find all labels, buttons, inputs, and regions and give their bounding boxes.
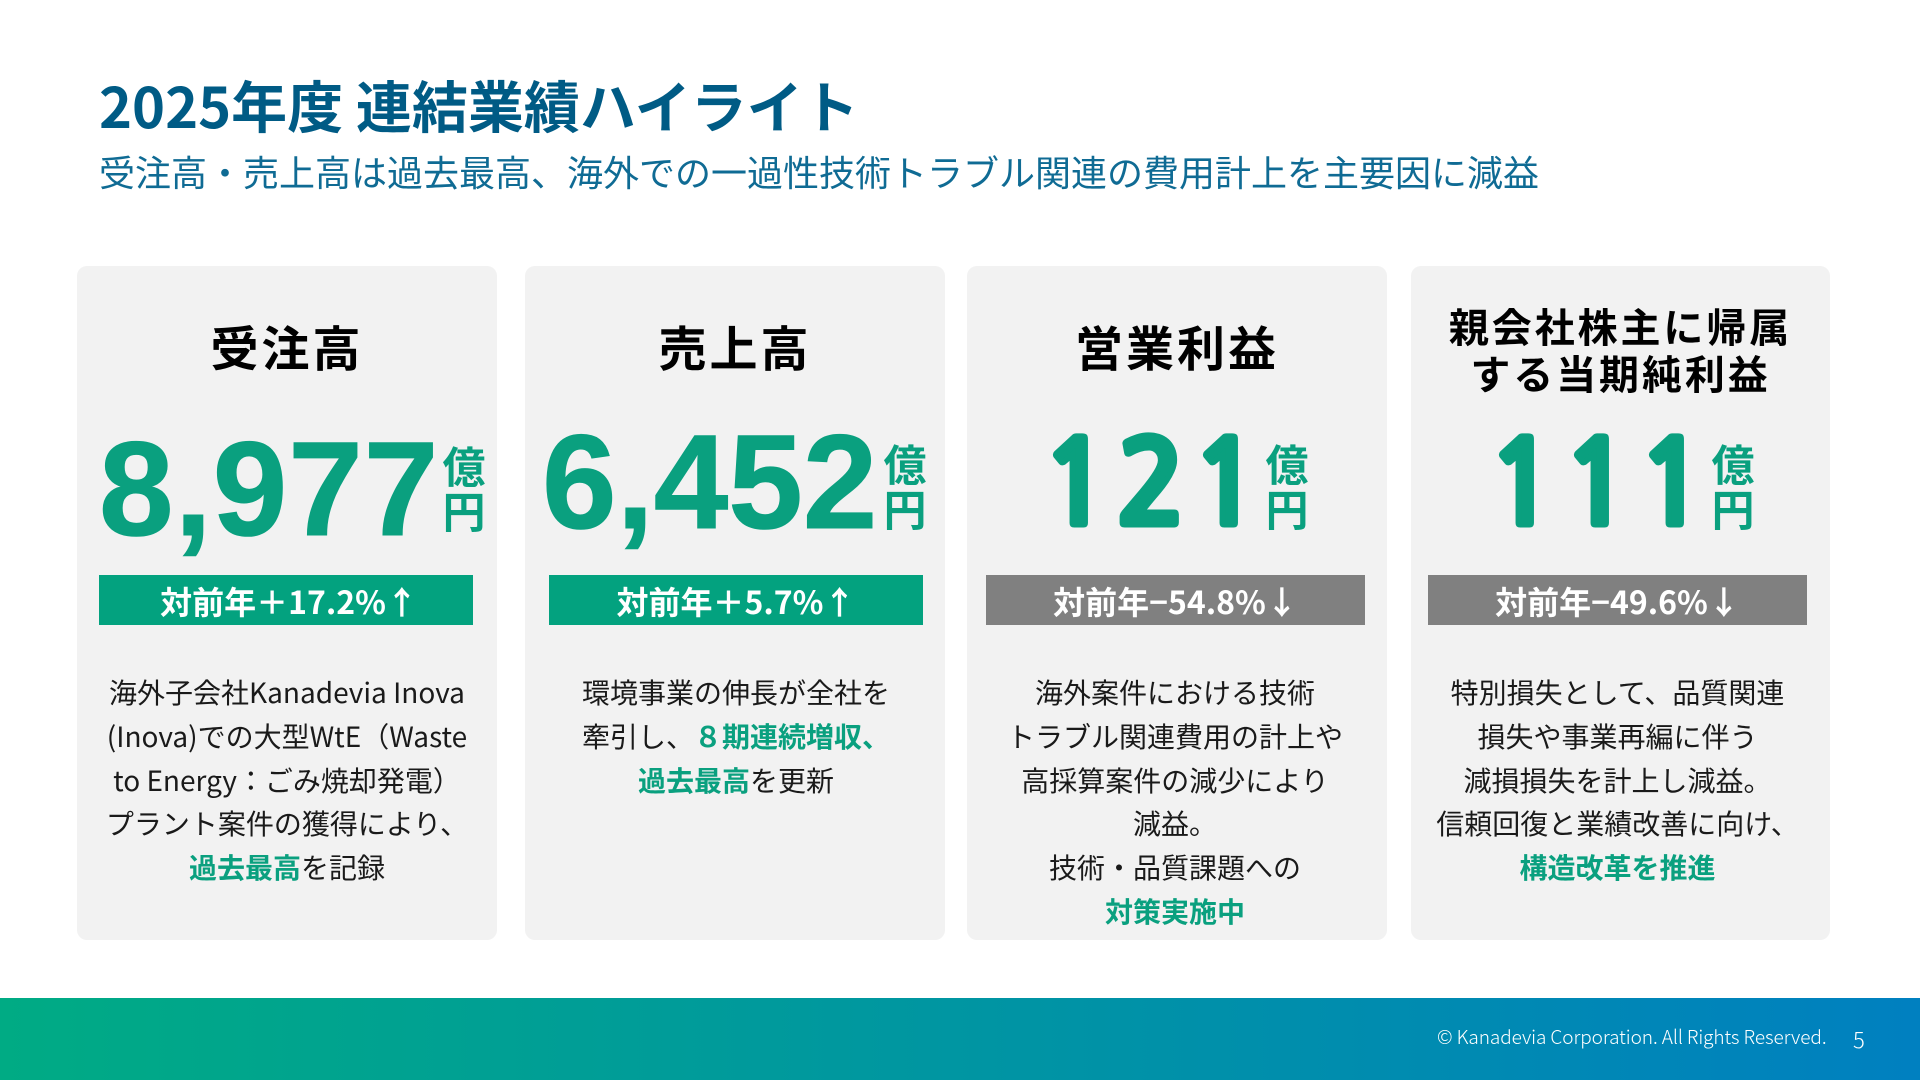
description: 過去最高を更新 [638, 760, 834, 800]
description: 高採算案件の減少により [1021, 760, 1329, 800]
description: 牽引し、８期連続増収、 [582, 716, 890, 756]
description: 信頼回復と業績改善に向け、 [1436, 803, 1799, 843]
change badge [99, 575, 473, 625]
description: 対策実施中 [1105, 891, 1245, 931]
figure: 111: 111 [1487, 427, 1712, 542]
panel: net income [1411, 266, 1830, 940]
description: トラブル関連費用の計上や [1007, 716, 1343, 756]
heading: net income [1449, 296, 1792, 401]
subtitle: 受注高・売上高は過去最高、海外での一過性技術トラブル関連の費用計上を主要因に減益 [99, 145, 1539, 197]
description: 海外子会社Kanadevia Inova [109, 672, 465, 712]
change badge: 対前年−49.6%↓ [1495, 578, 1740, 624]
description: 損失や事業再編に伴う [1477, 716, 1758, 756]
description: 構造改革を推進 [1519, 847, 1716, 887]
description: to Energy：ごみ焼却発電） [113, 760, 461, 800]
copyright: © Kanadevia Corporation. All Rights Reserved. [1437, 1023, 1826, 1050]
description: 環境事業の伸長が全社を [582, 672, 890, 712]
unit: 億円 [442, 434, 486, 541]
footer band [0, 998, 1920, 1080]
heading: operating profit: 営業利益 [1075, 310, 1279, 380]
change badge [986, 575, 1365, 625]
description: プラント案件の獲得により、 [106, 803, 468, 843]
description [1436, 672, 1799, 887]
description [1007, 672, 1343, 931]
description: (Inova)での大型WtE（Waste [107, 716, 467, 756]
description: 減損損失を計上し減益。 [1463, 760, 1772, 800]
title: 2025年度 連結業績ハイライト [99, 64, 859, 145]
unit: 億円 [884, 432, 926, 539]
panel: orders [77, 266, 497, 940]
description: 減益。 [1133, 803, 1217, 843]
change badge [1428, 575, 1807, 625]
panel: revenue [525, 266, 945, 940]
change badge [549, 575, 923, 625]
unit: 億円 [1266, 432, 1308, 539]
heading: revenue: 売上高 [658, 310, 812, 380]
figure: 6,452: 6,452 [542, 408, 877, 557]
heading: net income: 親会社株主に帰属 [1449, 296, 1792, 354]
panel: operating profit [967, 266, 1387, 940]
description [582, 672, 890, 800]
unit: 億円 [1712, 432, 1754, 539]
page number: 5 [1853, 1023, 1865, 1055]
change badge: 対前年＋17.2%↑ [160, 578, 418, 624]
change badge: 対前年−54.8%↓ [1053, 578, 1298, 624]
description: 過去最高を記録 [189, 847, 385, 887]
description [106, 672, 468, 887]
heading: orders: 受注高 [210, 310, 364, 380]
description: 技術・品質課題への [1049, 847, 1301, 887]
description: 特別損失として、品質関連 [1451, 672, 1784, 712]
heading: net income: する当期純利益 [1470, 343, 1771, 401]
description: 海外案件における技術 [1035, 672, 1315, 712]
change badge: 対前年＋5.7%↑ [616, 578, 855, 624]
figure: 8,977: 8,977 [99, 415, 439, 564]
figure: 121: 121 [1041, 427, 1266, 542]
